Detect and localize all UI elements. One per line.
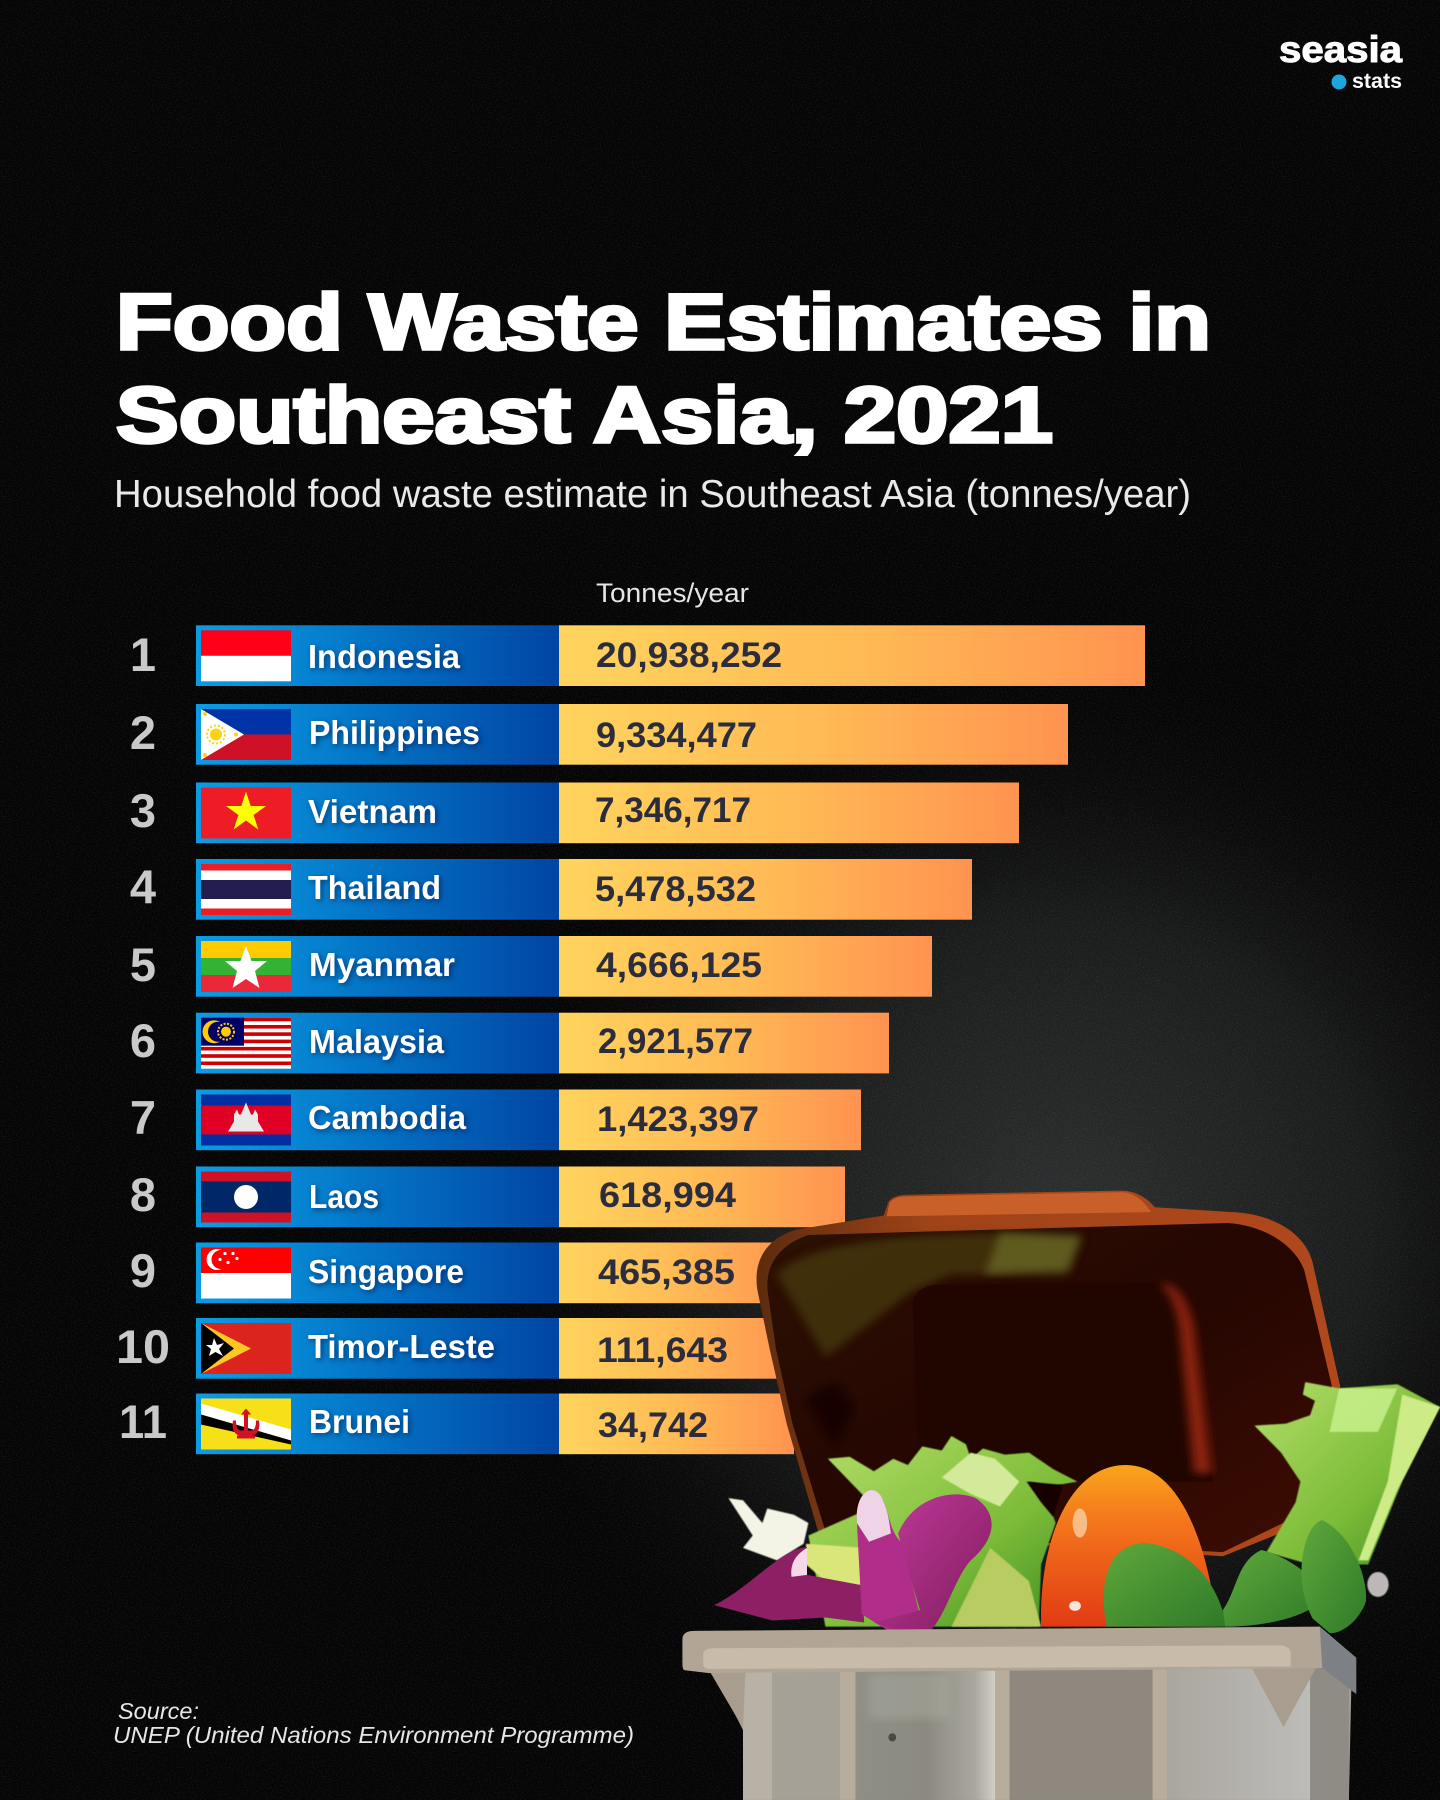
row 7: Cambodia: Cambodia — [308, 1099, 467, 1136]
title — [116, 277, 1211, 459]
lid inner panel — [913, 1283, 1213, 1482]
row 1: Indonesia: 1 — [130, 628, 156, 681]
row 5: Myanmar: Myanmar — [309, 946, 455, 983]
row 10: Timor-Leste: Timor-Leste — [308, 1328, 495, 1365]
source — [113, 1698, 634, 1748]
bin rim — [682, 1627, 1356, 1694]
flag: Malaysia — [201, 1018, 291, 1069]
photo: compost bin with vegetables — [682, 1191, 1440, 1800]
row 7: Cambodia: 1,423,397 — [597, 1100, 759, 1139]
row 10: Timor-Leste — [116, 1318, 794, 1379]
row 11: Brunei — [119, 1394, 794, 1454]
row 2: Philippines: 2 — [130, 706, 156, 759]
source: UNEP (United Nations Environment Programme) — [113, 1722, 634, 1748]
row 8: Laos: 8 — [130, 1168, 156, 1221]
row 7: Cambodia: 7 — [130, 1091, 156, 1144]
row 11: Brunei: Brunei — [309, 1403, 410, 1440]
row 6: Malaysia: Malaysia — [309, 1023, 445, 1060]
flag: Cambodia — [201, 1094, 291, 1146]
row 2: Philippines: 9,334,477 — [596, 716, 757, 755]
flag: Brunei — [201, 1398, 291, 1450]
row 3: Vietnam: 7,346,717 — [595, 791, 751, 830]
row 2: Philippines — [130, 704, 1068, 765]
row 10: Timor-Leste: 10 — [116, 1320, 170, 1373]
logo: seasia stats: seasia — [1279, 29, 1402, 70]
right lettuce leaf — [1254, 1382, 1440, 1564]
flag: Vietnam — [201, 788, 291, 838]
row 5: Myanmar: 4,666,125 — [596, 946, 762, 985]
row 1: Indonesia: 20,938,252 — [596, 636, 782, 675]
row 1: Indonesia — [130, 625, 1145, 686]
row 10: Timor-Leste: 111,643 — [597, 1331, 728, 1370]
spinach leaves — [1104, 1543, 1227, 1627]
row 4: Thailand: Thailand — [308, 869, 441, 906]
title: Food Waste Estimates in — [116, 277, 1211, 366]
row 1: Indonesia: Indonesia — [308, 638, 461, 675]
row 9: Singapore: 9 — [130, 1244, 156, 1297]
row 8: Laos — [130, 1166, 845, 1227]
row 6: Malaysia — [130, 1013, 889, 1073]
row 11: Brunei: 34,742 — [598, 1406, 708, 1445]
row 9: Singapore: 465,385 — [598, 1253, 735, 1292]
bin lid — [757, 1191, 1340, 1556]
column label: Tonnes/year: Tonnes/year — [596, 578, 749, 608]
subtitle: Household food waste estimate in Southeast Asia (tonnes/year) — [114, 473, 1191, 516]
flag: Singapore — [201, 1248, 291, 1298]
row 2: Philippines: Philippines — [309, 714, 480, 751]
row 8: Laos: Laos — [309, 1178, 379, 1215]
row 11: Brunei: 11 — [119, 1395, 167, 1448]
row 3: Vietnam: Vietnam — [308, 793, 437, 830]
bar chart — [116, 625, 1145, 1454]
logo: seasia stats: stats — [1352, 70, 1402, 93]
tomato — [1041, 1465, 1217, 1627]
row 9: Singapore — [130, 1242, 794, 1303]
bin body — [709, 1668, 1351, 1800]
flag: Philippines — [201, 709, 291, 760]
row 3: Vietnam: 3 — [130, 784, 156, 837]
row 9: Singapore: Singapore — [308, 1253, 464, 1290]
logo: seasia stats — [1279, 29, 1402, 93]
source: Source: — [118, 1698, 199, 1724]
row 6: Malaysia: 6 — [130, 1014, 156, 1067]
flag: Thailand — [201, 864, 291, 915]
row 5: Myanmar: 5 — [130, 938, 156, 991]
row 3: Vietnam — [130, 782, 1019, 843]
flag: Timor-Leste — [201, 1323, 291, 1374]
purple leaves — [714, 1547, 864, 1623]
row 4: Thailand: 5,478,532 — [595, 870, 756, 909]
row 4: Thailand — [130, 859, 972, 920]
flag: Myanmar — [201, 941, 291, 992]
row 8: Laos: 618,994 — [599, 1176, 737, 1215]
flag: Laos — [201, 1172, 291, 1222]
row 7: Cambodia — [130, 1090, 861, 1150]
flag: Indonesia — [201, 630, 291, 681]
row 4: Thailand: 4 — [130, 860, 156, 913]
back frilly lettuce — [808, 1436, 1077, 1627]
row 5: Myanmar — [130, 936, 932, 997]
row 6: Malaysia: 2,921,577 — [598, 1022, 753, 1061]
title: Southeast Asia, 2021 — [116, 370, 1053, 459]
